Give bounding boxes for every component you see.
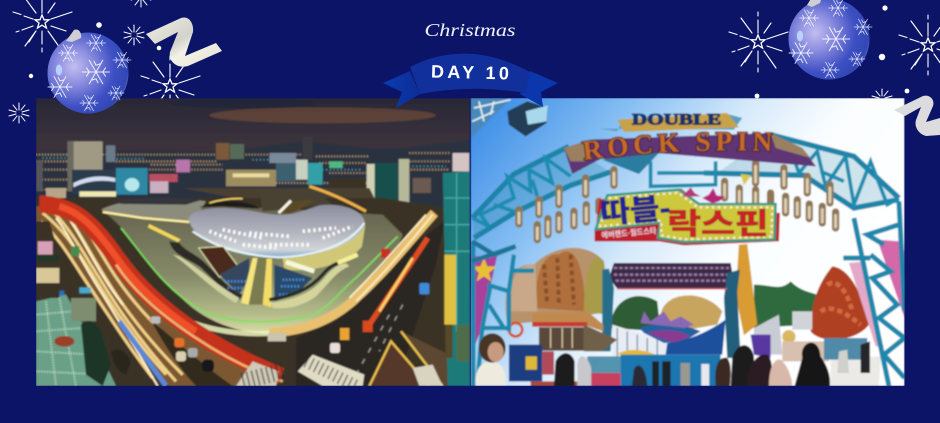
photo: Dongdaemun Design Plaza at night (36, 98, 470, 386)
dome wall (283, 225, 365, 270)
Korean sign (595, 189, 780, 245)
pendulum ride (609, 263, 734, 289)
right road light trails (269, 213, 434, 333)
photo: Double Rock Spin amusement ride: 에버랜드·월드스타 (601, 225, 657, 240)
right high-rise (443, 171, 470, 386)
night sky (36, 98, 470, 152)
pink banners (849, 261, 884, 346)
brown roof panel (199, 246, 241, 277)
light strip and walkway structure (148, 224, 181, 242)
icon: left silver ribbon (146, 17, 222, 67)
gondola at top left (471, 98, 512, 138)
right-hand road (296, 221, 444, 386)
photo: Double Rock Spin amusement ride: 따블- (599, 192, 672, 231)
autumn trees (506, 248, 611, 325)
left road light trails (36, 203, 284, 386)
bright sky (471, 98, 905, 386)
left leg truss (473, 241, 534, 386)
left ribbon tail (383, 71, 420, 108)
photo: Double Rock Spin amusement ride: 락스핀 (667, 208, 769, 241)
main arch truss (472, 152, 608, 235)
heading: Christmas: Christmas (424, 20, 516, 40)
spotlights (519, 163, 836, 240)
food kiosk (532, 311, 603, 331)
bottom right block (404, 332, 448, 386)
banner: DAY 10 ribbon (383, 54, 558, 108)
left edge shops (36, 221, 59, 298)
yellow ride tower (736, 244, 757, 335)
right leg truss (843, 201, 905, 386)
red maple tree (811, 266, 869, 340)
plaza (103, 205, 403, 334)
sign text: DOUBLE ROCK SPIN: DOUBLE (632, 112, 721, 129)
decoration: starbursts and sparkles (9, 0, 940, 123)
star on banner (472, 257, 497, 281)
ground and crowd fence (831, 356, 881, 386)
icon: right Christmas ornament (788, 0, 872, 80)
day label: DAY 10 (431, 61, 509, 84)
blue-lit courtyards (219, 258, 249, 295)
bright walkways (241, 258, 258, 305)
photo: Double Rock Spin amusement ride (470, 98, 905, 386)
silver dome (189, 205, 365, 257)
distant green trees (611, 296, 661, 331)
ground base (36, 198, 470, 386)
ribbon centre (410, 54, 530, 94)
roof courtyard (260, 198, 331, 212)
icon: right silver ribbon (894, 96, 940, 136)
left foreground plaza (36, 295, 116, 386)
right ribbon tail (520, 71, 558, 107)
ride base (612, 325, 667, 358)
sign back panels (564, 133, 816, 174)
icon: left Christmas ornament (48, 29, 131, 114)
city skyline (36, 140, 470, 208)
right side stalls (754, 315, 782, 355)
decoration: snow dots (29, 5, 909, 98)
cars (174, 338, 184, 347)
photo: Double Rock Spin amusement ride: ROCK SPIN (580, 130, 774, 162)
visitors in foreground (475, 361, 506, 386)
crosswalks (236, 361, 279, 386)
left wing of the plaza (100, 200, 206, 221)
